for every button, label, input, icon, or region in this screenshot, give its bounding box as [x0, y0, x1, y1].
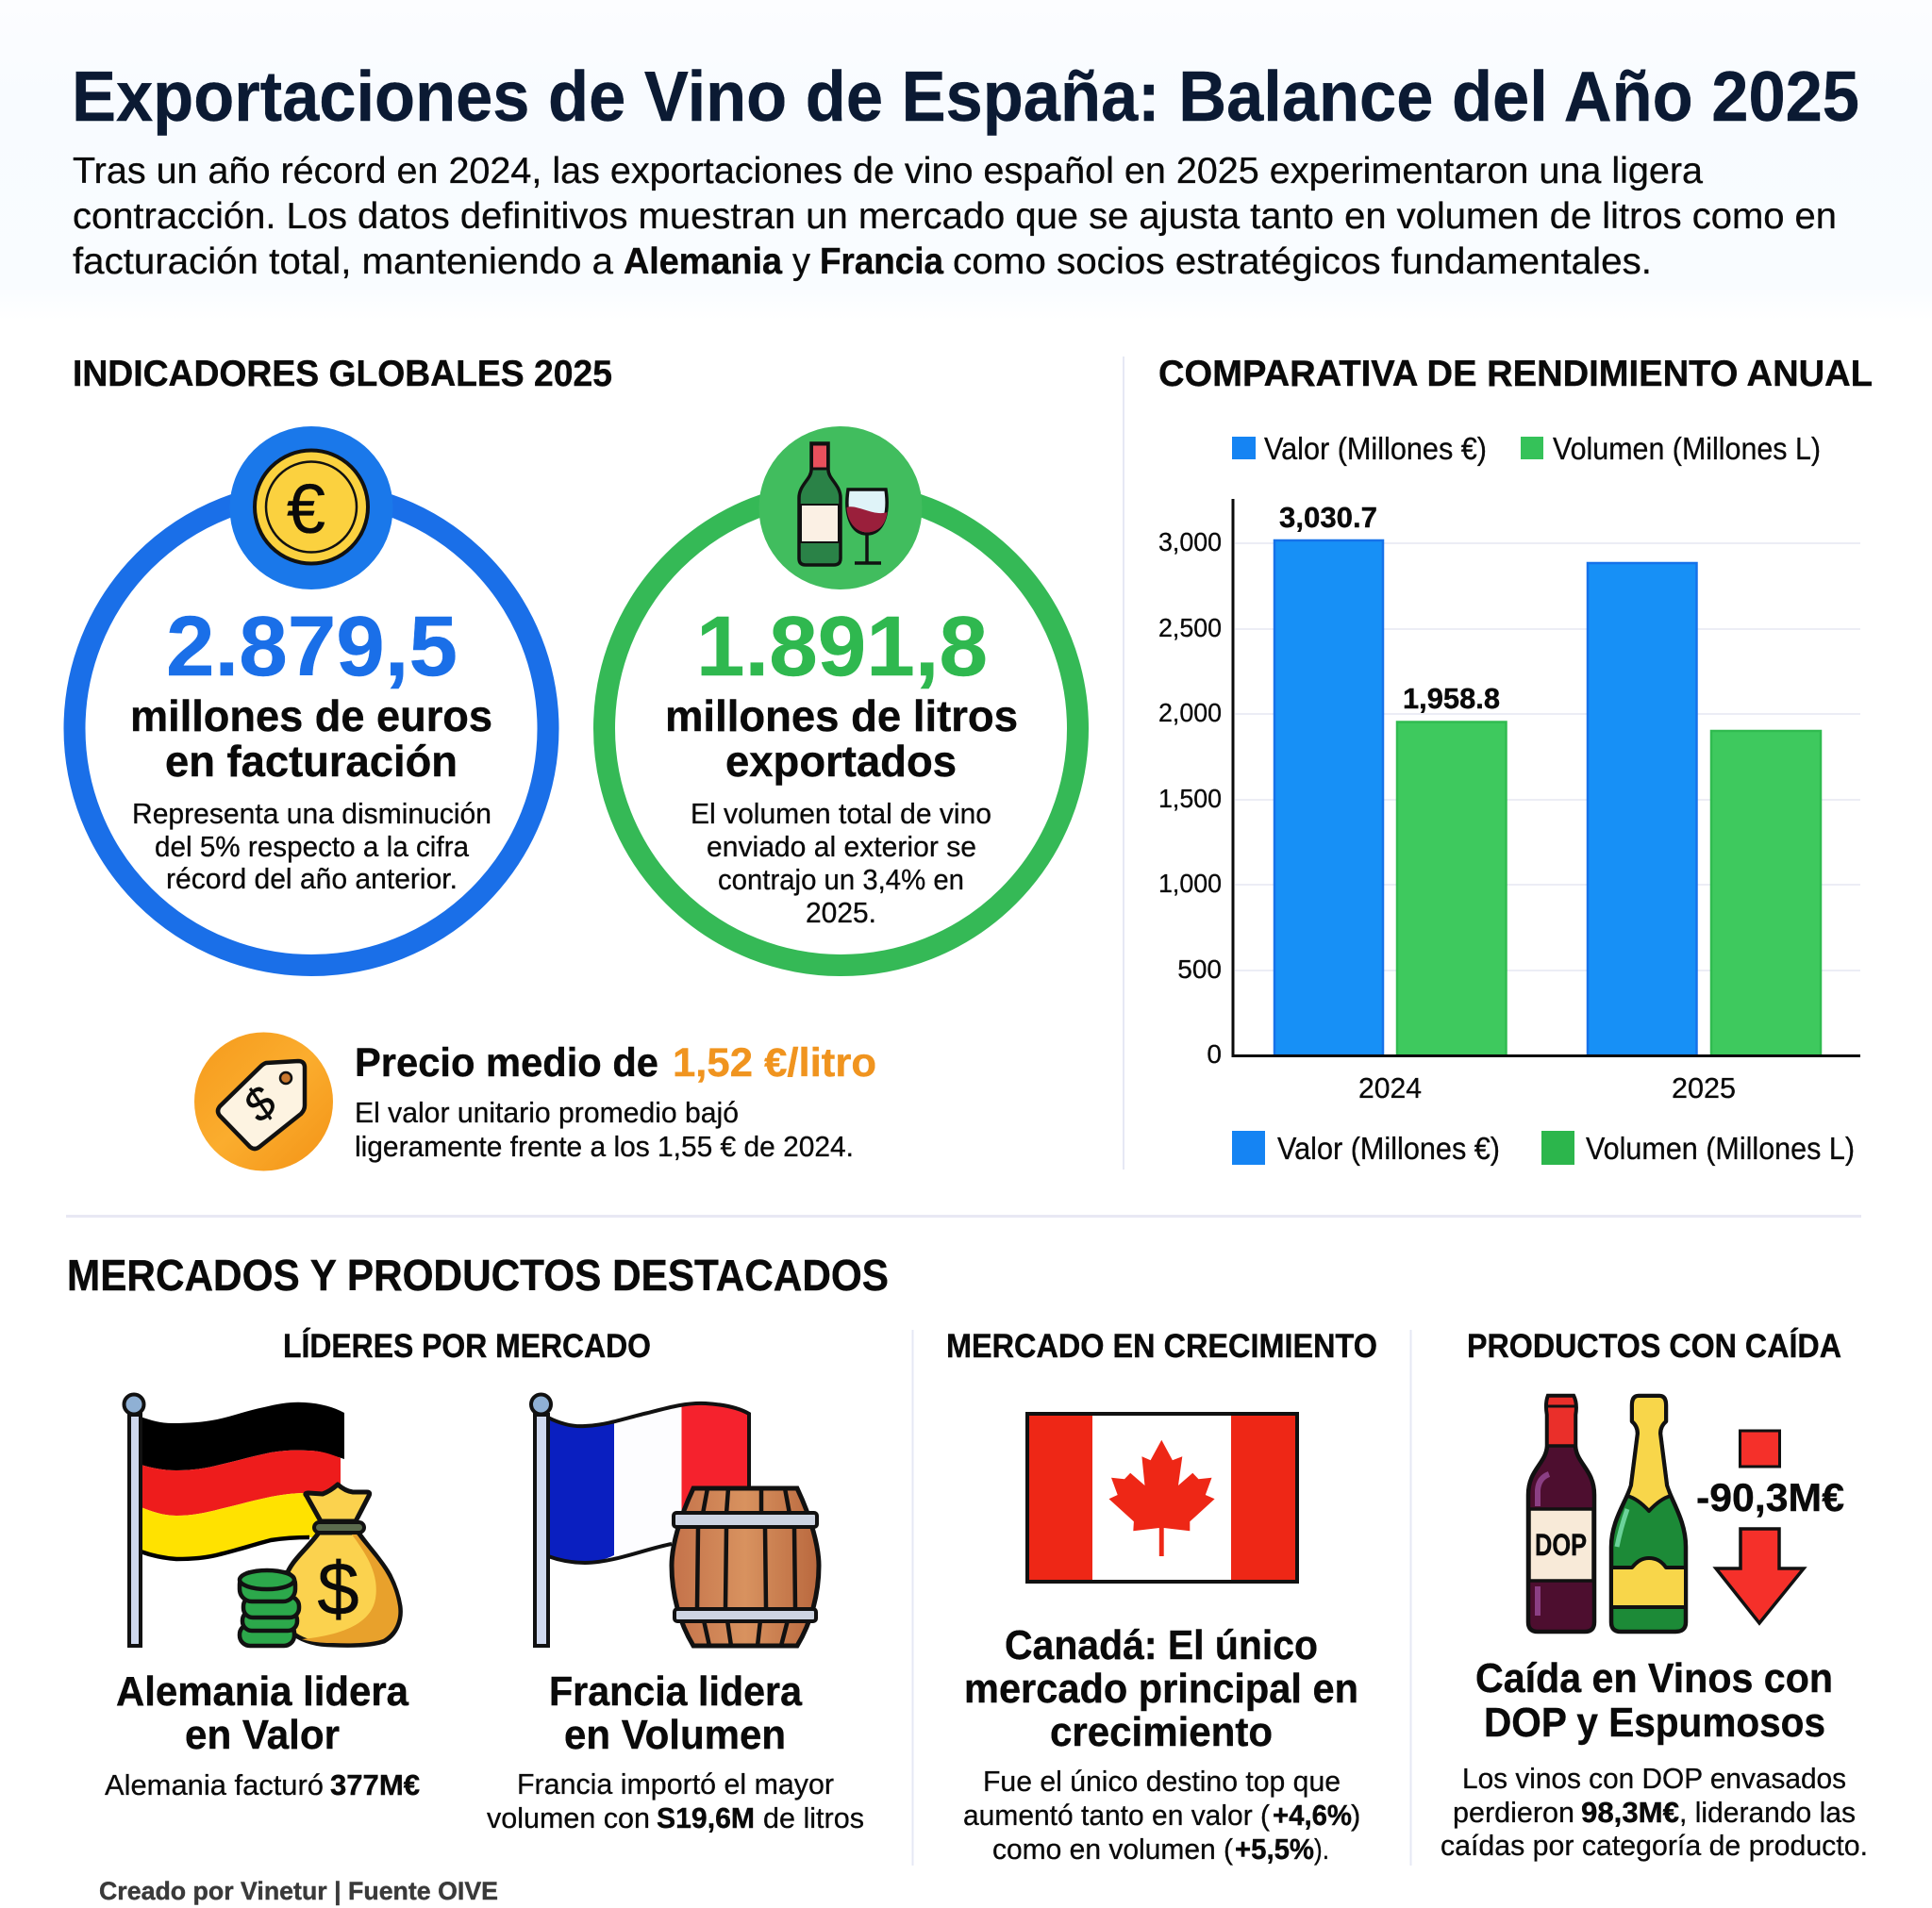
label: facturación: en facturación [165, 737, 458, 786]
description: volumen: contrajo un 3,4% en [718, 863, 964, 896]
legend: top: Volumen (Millones L) [1553, 431, 1821, 466]
card text: Canadá: +5,5% [1235, 1833, 1314, 1866]
intro text: facturación total, manteniendo a [73, 241, 613, 282]
intro text: Francia [820, 241, 943, 282]
legend: top: Valor (Millones €) [1264, 431, 1487, 466]
description: volumen [691, 797, 991, 929]
intro text: y [792, 241, 810, 282]
legend: bottom: Valor (Millones €) [1277, 1131, 1500, 1166]
panel: volumen [604, 426, 1077, 966]
value labels: 1,958.8 [1403, 682, 1500, 715]
footer credit: Creado por Vinetur | Fuente OIVE [99, 1877, 498, 1905]
label: volumen: millones de litros [665, 691, 1018, 740]
card text: caída: caídas por categoría de producto. [1441, 1829, 1868, 1862]
card text: Canadá: Fue el único destino top que [983, 1765, 1341, 1798]
card text: Canadá: +4,6% [1273, 1799, 1352, 1832]
card text: caída: 98,3M€ [1581, 1796, 1679, 1829]
card text: Alemania [105, 1668, 420, 1801]
card text: Canadá: crecimiento [1050, 1709, 1273, 1755]
legend: bottom [1232, 1131, 1855, 1166]
card text: caída: , liderando las [1679, 1796, 1856, 1829]
label: facturación: millones de euros [130, 691, 492, 740]
card text: caída: DOP y Espumosos [1484, 1700, 1825, 1746]
bar chart [1158, 499, 1860, 1104]
icon: french flag with barrel [531, 1394, 819, 1646]
label: facturación [130, 691, 492, 786]
intro text: como socios estratégicos fundamentales. [953, 241, 1652, 282]
number: facturación: 2.879,5 [166, 600, 458, 694]
coins [240, 1570, 299, 1646]
card text: Francia: volumen con [487, 1801, 650, 1834]
card text: Francia: de litros [763, 1801, 864, 1834]
intro text: Alemania [624, 241, 782, 282]
y axis labels: 2,500 [1158, 613, 1222, 642]
icon: euro coin: € [287, 470, 325, 548]
price description: El valor unitario promedio bajó [355, 1096, 739, 1129]
x axis labels [1358, 1071, 1736, 1104]
icon: red wine bottle DOP: DOP [1535, 1528, 1587, 1562]
icon: german flag with money bag [125, 1394, 400, 1646]
card text: Francia: Francia importó el mayor [517, 1767, 834, 1800]
icon: red down arrow with amount [1696, 1431, 1844, 1623]
legend: bottom: Volumen (Millones L) [1586, 1131, 1855, 1166]
price description: ligeramente frente a los 1,55 € de 2024. [355, 1130, 854, 1163]
description: facturación [132, 797, 491, 895]
label: volumen [665, 691, 1018, 786]
card text: Canadá: aumentó tanto en valor ( [963, 1799, 1271, 1832]
card text: Canadá: como en volumen ( [992, 1833, 1234, 1866]
title: Exportaciones de Vino de España: Balance del Año 2025 [72, 57, 1859, 136]
icon: canada flag [1027, 1414, 1297, 1582]
panel: facturación [75, 426, 548, 966]
bar: valor 2025 [1588, 563, 1696, 1055]
y axis labels: 0 [1207, 1039, 1222, 1069]
description: facturación: Representa una disminución [132, 797, 491, 830]
card text: caída: Caída en Vinos con [1475, 1655, 1833, 1701]
card text: Canadá: ). [1314, 1833, 1329, 1866]
icon: price tag: $ [237, 1074, 284, 1134]
barrel [672, 1488, 819, 1646]
legend: top [1232, 431, 1821, 466]
card text: Francia [487, 1668, 864, 1834]
heading: mercados y productos: MERCADOS Y PRODUCTOS DESTACADOS [67, 1251, 889, 1300]
card text: caída [1441, 1655, 1868, 1862]
card text: Canadá: ) [1351, 1799, 1360, 1832]
price heading: Precio medio de [355, 1040, 658, 1086]
price heading: 1,52 €/litro [673, 1040, 876, 1086]
card text: Canadá: mercado principal en [964, 1666, 1358, 1712]
panel: precio medio [194, 1032, 876, 1171]
subheading: líderes: LÍDERES POR MERCADO [283, 1327, 651, 1365]
description: facturación: récord del año anterior. [166, 862, 458, 895]
icon: red wine bottle DOP [1528, 1396, 1594, 1632]
axes [1233, 499, 1860, 1056]
icon: bottle and glass [758, 426, 923, 589]
bar: valor 2024 [1274, 540, 1383, 1055]
card text: Alemania: en Valor [185, 1712, 340, 1758]
card text: caída: perdieron [1453, 1796, 1574, 1829]
bar: volumen 2024 [1397, 722, 1506, 1055]
y axis labels: 2,000 [1158, 698, 1222, 727]
card text: Francia: S19,6M [657, 1801, 755, 1834]
money bag [286, 1533, 400, 1645]
header band [0, 0, 1932, 321]
y axis labels: 500 [1177, 954, 1222, 984]
card text: Francia: en Volumen [564, 1712, 786, 1758]
card text: Alemania: 377M€ [330, 1768, 420, 1801]
subheading: crecimiento: MERCADO EN CRECIMIENTO [946, 1328, 1377, 1365]
y axis labels: 3,000 [1158, 527, 1222, 556]
heading: comparativa: COMPARATIVA DE RENDIMIENTO ANUAL [1158, 354, 1873, 394]
card text: Canadá: Canadá: El único [1005, 1622, 1318, 1668]
card text: caída: Los vinos con DOP envasados [1462, 1762, 1846, 1795]
description: volumen: 2025. [806, 896, 876, 929]
value labels: 3,030.7 [1279, 501, 1377, 534]
bar: volumen 2025 [1711, 731, 1821, 1055]
price description [355, 1096, 854, 1163]
intro text: contracción. Los datos definitivos muestran un mercado que se ajusta tanto en volumen de litros como en [73, 196, 1837, 237]
panel: líderes por mercado [105, 1327, 864, 1834]
card text: Francia: Francia lidera [549, 1668, 802, 1715]
y axis labels: 1,000 [1158, 869, 1222, 898]
description: volumen: enviado al exterior se [707, 830, 976, 863]
description: volumen: El volumen total de vino [691, 797, 991, 830]
icon: euro coin [230, 426, 392, 589]
label: volumen: exportados [725, 737, 957, 786]
panel: productos con caída [1441, 1327, 1868, 1862]
icon: red down arrow with amount: -90,3M€ [1696, 1475, 1844, 1519]
heading: indicadores globales: INDICADORES GLOBALES 2025 [73, 354, 612, 394]
panel: mercado en crecimiento [946, 1328, 1377, 1866]
icon: price tag [194, 1032, 333, 1171]
price heading [355, 1040, 876, 1086]
number: volumen: 1.891,8 [696, 600, 988, 694]
y axis labels [1158, 527, 1222, 1069]
description: facturación: del 5% respecto a la cifra [155, 830, 470, 863]
card text: Canadá [963, 1622, 1360, 1866]
card text: Alemania: Alemania lidera [116, 1668, 408, 1715]
icon: german flag with money bag: $ [317, 1547, 359, 1631]
intro text [73, 151, 1837, 282]
y axis labels: 1,500 [1158, 784, 1222, 813]
intro text: Tras un año récord en 2024, las exportaciones de vino español en 2025 experimentaron una ligera [73, 151, 1703, 191]
subheading: caída: PRODUCTOS CON CAÍDA [1467, 1327, 1841, 1365]
card text: Alemania: Alemania facturó [105, 1768, 324, 1801]
icon: sparkling wine bottle [1611, 1396, 1686, 1632]
value labels [1279, 501, 1500, 715]
x axis labels: 2025 [1672, 1071, 1736, 1104]
x axis labels: 2024 [1358, 1071, 1422, 1104]
